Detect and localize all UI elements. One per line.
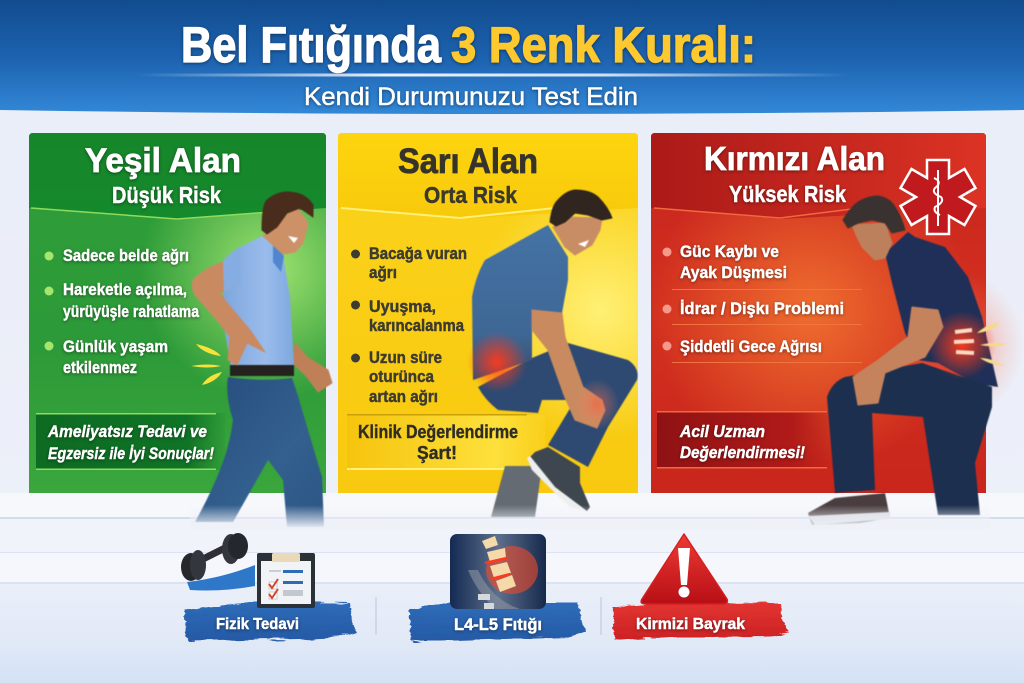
floor band [0,493,1024,584]
green bullet list: Sadece belde ağrı [63,246,189,265]
yellow bullet list: Bacağa vuran [369,244,467,263]
divider [376,597,377,635]
green callout: Ameliyatsız Tedavi ve [47,422,207,441]
green callout: Egzersiz ile İyi Sonuçlar! [48,444,214,463]
green callout [36,413,225,470]
yellow callout: Şart! [417,443,457,463]
title [181,17,756,73]
icon: towel and dumbbell [181,533,255,590]
red bullet list: Güc Kaybı ve [680,242,779,261]
figure: man with raised knee and leg pain [467,190,638,517]
green bullet list: yürüyüşle rahatlama [63,303,200,321]
bottom item: red flag [613,534,788,640]
red brush label [613,603,788,640]
header band [0,0,1024,114]
green heading: Yeşil Alan [85,142,241,180]
panel: green zone [29,133,332,527]
yellow callout [347,414,545,470]
red subheading: Yüksek Risk [729,181,846,207]
icon: clipboard checklist [257,553,315,608]
yellow bullet list [351,244,467,406]
icon: spine x-ray [450,534,546,609]
title: 3 Renk Kuralı: [451,17,756,73]
yellow bullet list: karıncalanma [369,316,464,335]
green panel background [29,133,326,493]
green bullet list: Günlük yaşam [63,337,168,356]
red brush label: Kirmizi Bayrak [636,616,745,633]
title rule [135,74,850,76]
red bullet list: Şiddetli Gece Ağrısı [680,337,822,356]
green bullet list: etkilenmez [63,359,137,377]
green bullet list: Hareketle açılma, [63,281,187,299]
green subheading: Düşük Risk [112,182,221,208]
yellow bullet list: ağrı [369,263,397,282]
icon: star of life [900,160,976,234]
blue brush label [410,603,586,642]
green bullet list [44,246,200,377]
red callout: Değerlendirmesi! [680,443,805,462]
icon: warning triangle [641,534,727,604]
red bullet list [662,242,862,363]
divider [600,597,602,635]
icon: yellow pain rays [191,344,222,385]
red bullet list: Ayak Düşmesi [680,263,787,282]
title: Bel Fıtığında [181,17,442,73]
yellow subheading: Orta Risk [424,182,517,208]
yellow bullet list: Uyuşma, [369,297,436,316]
blue brush label [184,601,356,641]
figure: man holding lower back [192,192,332,527]
red panel background [651,133,986,493]
leg fade overlay [190,505,990,529]
yellow bullet list: oturünca [369,367,434,386]
yellow bullet list: artan ağrı [369,387,438,406]
yellow bullet list: Uzun süre [369,348,442,367]
red callout [657,411,837,468]
blue brush label: Fizik Tedavi [216,616,299,633]
red bullet list: İdrar / Dişkı Problemi [680,299,844,318]
yellow panel background [338,133,638,493]
bottom item: physical therapy [181,533,356,641]
panel: red zone [651,133,1024,525]
yellow heading: Sarı Alan [398,142,538,181]
blue brush label: L4-L5 Fıtığı [454,616,542,634]
red heading: Kırmızı Alan [704,140,885,177]
panel: yellow zone [338,133,638,517]
red callout: Acil Uzman [679,422,765,441]
subtitle: Kendi Durumunuzu Test Edin [304,83,638,111]
yellow callout: Klinik Değerlendirme [358,422,518,442]
figure: man bending with severe back pain [808,196,1024,525]
bottom item: L4-L5 hernia [410,534,586,642]
